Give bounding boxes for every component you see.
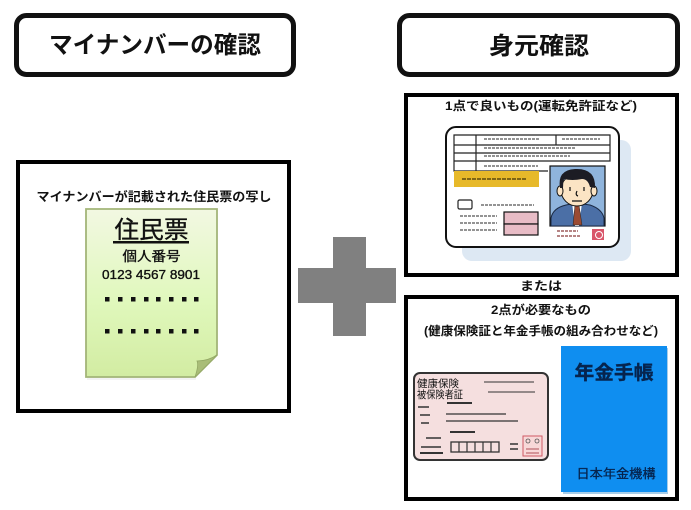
pink stamps — [504, 212, 538, 235]
icon: plus sign — [298, 237, 396, 336]
portrait photo — [550, 166, 605, 226]
heading: identity check — [400, 16, 678, 74]
panel caption: 1点で良いもの(運転免許証など) — [445, 98, 637, 113]
issuer text — [557, 231, 580, 236]
panel caption line 1: 2点が必要なもの — [491, 302, 591, 317]
heading: my number check — [16, 16, 294, 74]
yellow band — [454, 171, 539, 187]
panel: one-item identification — [406, 95, 677, 275]
card title: 健康保険 — [417, 377, 459, 390]
icon: health insurance card — [414, 373, 548, 460]
red seal — [592, 229, 604, 240]
individual number label: 個人番号 — [122, 249, 180, 264]
book title: 年金手帳 — [574, 361, 654, 384]
panel: resident record copy — [18, 162, 289, 411]
icon: health insurance card: 被保険者証 — [417, 388, 463, 401]
heading: identity check: 身元確認 — [489, 33, 589, 60]
small checkbox — [458, 200, 472, 209]
icon: driver's license — [446, 127, 631, 261]
card shadow — [462, 140, 631, 261]
icon: pension book — [561, 346, 668, 494]
panel: two-item identification — [406, 297, 677, 499]
document title: 住民票 — [114, 217, 188, 244]
book issuer: 日本年金機構 — [576, 467, 656, 481]
panel caption: マイナンバーが記載された住民票の写し — [36, 189, 272, 204]
heading: my number check: マイナンバーの確認 — [49, 32, 261, 59]
individual number: 0123 4567 8901 — [102, 268, 200, 282]
resident record document — [86, 209, 217, 380]
page fold — [195, 355, 217, 377]
panel caption line 2: (健康保険証と年金手帳の組み合わせなど) — [424, 323, 658, 338]
dotted lines — [105, 297, 198, 334]
seal — [523, 436, 542, 456]
connector text: or: または — [520, 279, 562, 293]
